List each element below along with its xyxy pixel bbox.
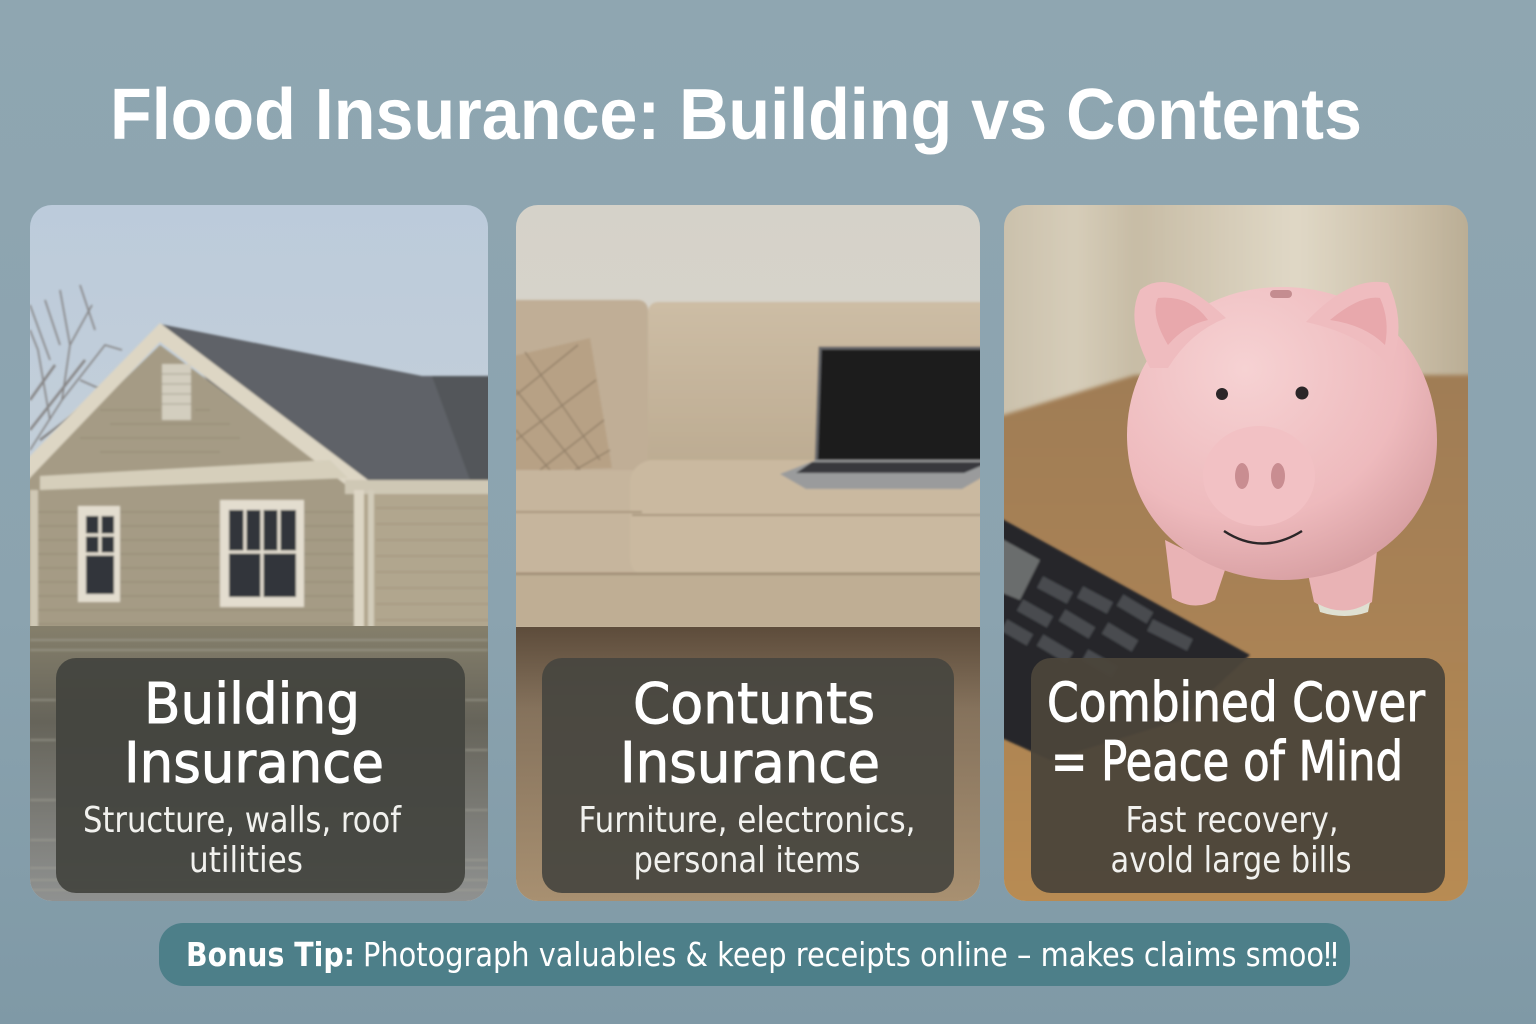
- caption card: building: Structure, walls, roof: [83, 800, 402, 841]
- panel: combined cover: [1004, 205, 1468, 901]
- icon: flooded house: [25, 323, 495, 640]
- caption card: building: Insurance: [124, 731, 384, 796]
- flood water: [30, 626, 488, 901]
- caption card: combined: [1031, 658, 1445, 893]
- caption card: building: utilities: [189, 840, 303, 881]
- icon: piggy bank: [1127, 282, 1437, 616]
- caption card: contents: Insurance: [620, 731, 880, 796]
- caption card: contents: [542, 658, 954, 893]
- caption card: contents: personal items: [634, 840, 860, 881]
- panel: contents insurance: [505, 205, 995, 901]
- bonus tip banner: Bonus Tip:: [186, 935, 355, 974]
- table surface: [1004, 372, 1468, 901]
- caption card: contents: Furniture, electronics,: [578, 800, 916, 841]
- icon: calculator: [995, 515, 1250, 760]
- caption card: combined: = Peace of Mind: [1051, 730, 1403, 793]
- caption card: contents: Contunts: [633, 672, 875, 737]
- caption card: combined: avold large bills: [1110, 840, 1352, 881]
- bonus tip banner: Photograph valuables & keep receipts online – makes claims smoo‼: [363, 935, 1338, 974]
- title: Flood Insurance: Building vs Contents: [110, 75, 1362, 155]
- bonus tip banner: [159, 923, 1350, 986]
- caption card: building: Building: [144, 672, 360, 737]
- caption card: building: [56, 658, 465, 893]
- icon: bare tree: [30, 285, 125, 450]
- panel: building insurance: [25, 205, 495, 901]
- caption card: combined: Fast recovery,: [1126, 800, 1338, 841]
- flood water: [516, 627, 980, 901]
- icon: sofa with laptop: [505, 300, 995, 628]
- caption card: combined: Combined Cover: [1047, 671, 1426, 734]
